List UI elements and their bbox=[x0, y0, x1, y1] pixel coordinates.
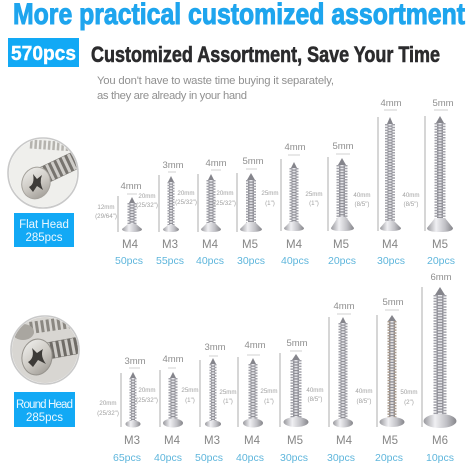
screw: M5 25mm 30pcs bbox=[237, 156, 279, 267]
screw: M4 20mm 40pcs: 20mm bbox=[216, 190, 234, 197]
screw: M4 25mm 40pcs bbox=[219, 340, 266, 464]
screw: M5 40mm 20pcs: 20pcs bbox=[328, 255, 356, 267]
screw: M5 40mm 20pcs bbox=[355, 297, 404, 464]
screw: M4 20mm 40pcs: 4mm bbox=[162, 354, 184, 365]
screw: M4 20mm 40pcs: (25/32") bbox=[136, 397, 158, 404]
screw: M4 20mm 40pcs: 40pcs bbox=[196, 255, 224, 267]
screw: M5 25mm 30pcs: M5 bbox=[287, 435, 303, 447]
screw: M5 40mm 20pcs: 40mm bbox=[355, 388, 373, 395]
screw: M5 40mm 20pcs bbox=[328, 141, 371, 267]
label: flat head: 285pcs bbox=[25, 232, 63, 244]
screw: M4 20mm 40pcs: 40pcs bbox=[154, 452, 182, 464]
screw: M4 20mm 40pcs: (25/32") bbox=[214, 200, 236, 207]
screw: M5 25mm 30pcs: 5mm bbox=[286, 338, 308, 349]
screw: M3 20mm 65pcs: M3 bbox=[124, 435, 140, 447]
screw: M5 25mm 30pcs: 5mm bbox=[242, 156, 264, 167]
description text: You don't have to waste time buying it separately, bbox=[97, 75, 334, 87]
screw: M4 40mm 30pcs: (8/5") bbox=[308, 396, 322, 403]
screw: M5 25mm 30pcs bbox=[260, 338, 308, 464]
screw: M3 25mm 50pcs: M3 bbox=[204, 435, 220, 447]
screw: M6 50mm 10pcs: 50mm bbox=[400, 389, 418, 396]
photo: flat head screw bbox=[8, 138, 80, 208]
screw: M4 25mm 40pcs: 4mm bbox=[244, 340, 266, 351]
screw: M4 25mm 40pcs: 40pcs bbox=[281, 255, 309, 267]
screw: M3 20mm 65pcs: 65pcs bbox=[113, 452, 141, 464]
screw: M5 25mm 30pcs: 25mm bbox=[261, 190, 279, 197]
screw: M4 25mm 40pcs: 25mm bbox=[219, 389, 237, 396]
screw: M4 40mm 30pcs: (8/5") bbox=[404, 201, 418, 208]
screw: M4 40mm 30pcs bbox=[377, 98, 420, 267]
screw: M5 40mm 20pcs: (8/5") bbox=[357, 398, 371, 405]
screw: M5 40mm 20pcs: 40mm bbox=[353, 192, 371, 199]
screw: M3 20mm 55pcs: 3mm bbox=[162, 160, 184, 171]
screw: M4 12mm 50pcs bbox=[95, 181, 158, 267]
screw: M4 20mm 40pcs bbox=[196, 158, 236, 267]
label: round head bbox=[14, 392, 75, 427]
screw: M4 12mm 50pcs: 20mm bbox=[138, 193, 156, 200]
screw: M5 25mm 30pcs: (1") bbox=[265, 200, 275, 207]
screw: M5 40mm 20pcs: 5mm bbox=[432, 98, 454, 109]
label: flat head: Flat Head bbox=[19, 219, 69, 231]
screw: M3 20mm 65pcs: 20mm bbox=[99, 400, 117, 407]
screw: M4 20mm 40pcs: M4 bbox=[202, 239, 219, 251]
flat head row bbox=[95, 98, 455, 267]
screw: M5 40mm 20pcs: (8/5") bbox=[355, 201, 369, 208]
screw: M4 12mm 50pcs: 12mm bbox=[97, 204, 115, 211]
round head row bbox=[97, 272, 456, 464]
screw: M4 40mm 30pcs bbox=[306, 301, 355, 464]
screw: M4 40mm 30pcs: M4 bbox=[382, 239, 399, 251]
label: round head: Round Head bbox=[16, 399, 73, 411]
screw: M3 25mm 50pcs: 25mm bbox=[181, 387, 199, 394]
screw: M6 50mm 10pcs: 6mm bbox=[430, 272, 452, 283]
screw: M4 25mm 40pcs bbox=[281, 142, 323, 267]
screw: M4 25mm 40pcs: M4 bbox=[286, 239, 303, 251]
screw: M3 20mm 55pcs: M3 bbox=[162, 239, 178, 251]
screw: M4 12mm 50pcs: 4mm bbox=[120, 181, 142, 192]
screw: M4 25mm 40pcs: (1") bbox=[223, 398, 233, 405]
screw: M4 25mm 40pcs: 40pcs bbox=[236, 452, 264, 464]
screw: M3 20mm 55pcs: (25/32") bbox=[175, 199, 197, 206]
screw: M5 25mm 30pcs: 30pcs bbox=[280, 452, 308, 464]
screw: M5 25mm 30pcs: M5 bbox=[242, 239, 258, 251]
screw: M5 40mm 20pcs: M5 bbox=[382, 435, 398, 447]
screw: M4 40mm 30pcs: 4mm bbox=[333, 301, 355, 312]
screw: M4 20mm 40pcs: M4 bbox=[164, 435, 181, 447]
label: round head: 285pcs bbox=[26, 412, 63, 424]
screw: M4 40mm 30pcs: 4mm bbox=[380, 98, 402, 109]
screw: M3 25mm 50pcs: 50pcs bbox=[195, 452, 223, 464]
screw: M4 20mm 40pcs: 20mm bbox=[138, 387, 156, 394]
description text bbox=[97, 75, 334, 102]
screw: M4 12mm 50pcs: (25/32") bbox=[136, 202, 158, 209]
screw: M6 50mm 10pcs bbox=[400, 272, 456, 464]
screw: M4 40mm 30pcs: 30pcs bbox=[327, 452, 355, 464]
screw: M5 25mm 30pcs: 30pcs bbox=[237, 255, 265, 267]
screw: M6 50mm 10pcs: (2") bbox=[404, 399, 414, 406]
description text: as they are already in your hand bbox=[97, 90, 247, 102]
screw: M5 40mm 20pcs: 5mm bbox=[382, 297, 404, 308]
screw: M5 40mm 20pcs: 5mm bbox=[332, 141, 354, 152]
screw: M6 50mm 10pcs: M6 bbox=[432, 435, 448, 447]
screw: M6 50mm 10pcs: 10pcs bbox=[426, 452, 454, 464]
photo: round head screw bbox=[10, 316, 80, 386]
screw: M4 20mm 40pcs: 4mm bbox=[205, 158, 227, 169]
screw: M5 40mm 20pcs: M5 bbox=[432, 239, 448, 251]
badge: 570pcs: 570pcs bbox=[11, 43, 76, 65]
screw: M4 25mm 40pcs: 4mm bbox=[284, 142, 306, 153]
screw: M4 25mm 40pcs: (1") bbox=[309, 200, 319, 207]
screw: M3 20mm 55pcs bbox=[156, 160, 197, 267]
screw: M3 20mm 55pcs: 55pcs bbox=[156, 255, 184, 267]
screw: M3 25mm 50pcs bbox=[181, 342, 226, 464]
screw: M4 40mm 30pcs: 40mm bbox=[402, 192, 420, 199]
screw: M4 40mm 30pcs: 40mm bbox=[306, 387, 324, 394]
screw: M4 40mm 30pcs: M4 bbox=[336, 435, 353, 447]
screw: M4 12mm 50pcs: (29/64") bbox=[95, 213, 117, 220]
screw: M3 20mm 55pcs: 20mm bbox=[177, 190, 195, 197]
screw: M5 40mm 20pcs: 20pcs bbox=[375, 452, 403, 464]
screw: M5 40mm 20pcs: 20pcs bbox=[427, 255, 455, 267]
screw: M3 20mm 65pcs: (25/32") bbox=[97, 410, 119, 417]
screw: M4 25mm 40pcs: M4 bbox=[244, 435, 261, 447]
screw: M3 20mm 65pcs bbox=[97, 356, 146, 464]
screw: M4 20mm 40pcs bbox=[136, 354, 184, 464]
screw: M4 12mm 50pcs: M4 bbox=[122, 239, 139, 251]
screw: M3 25mm 50pcs: 3mm bbox=[204, 342, 226, 353]
screw: M3 25mm 50pcs: (1") bbox=[185, 397, 195, 404]
screw: M5 40mm 20pcs bbox=[425, 98, 455, 267]
label: flat head bbox=[14, 213, 74, 247]
screw: M4 25mm 40pcs: 25mm bbox=[305, 191, 323, 198]
screw: M4 40mm 30pcs: 30pcs bbox=[377, 255, 405, 267]
screw: M3 20mm 65pcs: 3mm bbox=[124, 356, 146, 367]
screw: M4 12mm 50pcs: 50pcs bbox=[115, 255, 143, 267]
screw: M5 40mm 20pcs: M5 bbox=[333, 239, 349, 251]
screw: M5 25mm 30pcs: 25mm bbox=[260, 388, 278, 395]
screw: M5 25mm 30pcs: (1") bbox=[264, 398, 274, 405]
